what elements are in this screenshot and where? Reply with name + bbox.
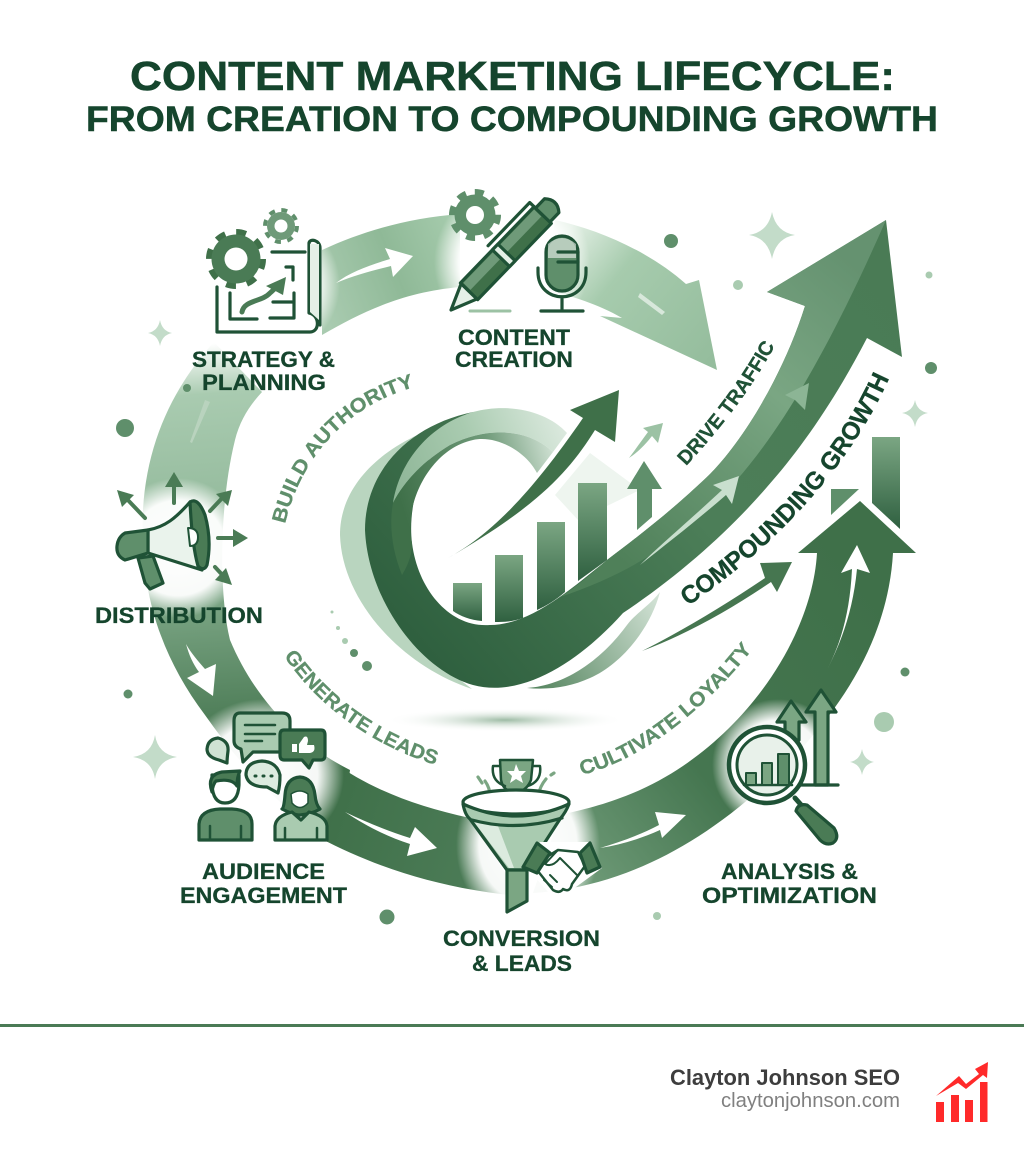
pale outer crescent [340, 422, 472, 689]
heading: CONVERSION [443, 926, 600, 951]
heading: CREATION [455, 347, 573, 372]
icon: red growth chart [936, 1062, 988, 1122]
glow: strategy [196, 213, 340, 357]
central rising arrow [448, 390, 619, 558]
glow: content creation [434, 182, 590, 342]
pale lower crescent [527, 592, 660, 689]
bar: 2 [495, 555, 523, 622]
icon: megaphone with arrows [117, 472, 248, 589]
title [86, 53, 938, 139]
label: build authority: BUILD AUTHORITY [272, 374, 410, 523]
heading [443, 926, 600, 976]
label: cultivate loyalty: CULTIVATE LOYALTY [580, 641, 749, 774]
pale band of C arc [393, 408, 567, 503]
panel: conversion and leads [443, 760, 602, 976]
ring segment: left side [143, 342, 350, 845]
brand name: Clayton Johnson SEO [670, 1065, 900, 1090]
title: CONTENT MARKETING LIFECYCLE: [130, 53, 895, 99]
light arrow on main: upper [785, 383, 809, 410]
footer divider [0, 1024, 1024, 1027]
glow: distribution [108, 478, 248, 618]
dark swoosh with main arrow [365, 220, 902, 688]
ring segment: strategy to creation [322, 214, 460, 335]
ghost house shape [555, 453, 640, 520]
bar: 4 [578, 483, 607, 581]
lifecycle ring [143, 214, 916, 896]
panel: distribution [95, 472, 263, 628]
heading: ANALYSIS & [721, 859, 858, 884]
heading: ENGAGEMENT [180, 883, 348, 908]
heading: OPTIMIZATION [702, 883, 877, 908]
heading: DISTRIBUTION [95, 603, 263, 628]
mid band of C arc [391, 432, 553, 575]
bar: 3 [537, 522, 565, 610]
heading [455, 325, 573, 372]
floor shadow [385, 708, 625, 732]
central swirl and growth arrows [340, 220, 902, 732]
icon: gears and blueprint [209, 210, 320, 332]
bar: 1 [453, 583, 482, 621]
glow: conversion [456, 761, 600, 929]
curved labels [272, 341, 889, 774]
heading: PLANNING [202, 370, 326, 395]
heading [180, 859, 348, 908]
heading [702, 859, 877, 908]
label: generate leads: GENERATE LEADS [286, 650, 438, 764]
heading: CONTENT [458, 325, 571, 350]
heading: STRATEGY & [192, 347, 335, 372]
heading [192, 347, 335, 395]
panel: content creation [438, 190, 586, 372]
icon: magnifier with bars and arrows [729, 690, 838, 844]
heading: AUDIENCE [202, 859, 325, 884]
ring segment: conversion to analysis and growth arrow [533, 501, 916, 893]
icon: trophy, funnel and handshake [463, 760, 602, 912]
glow: analysis [712, 699, 844, 831]
small up arrow [627, 461, 662, 530]
label: drive traffic: DRIVE TRAFFIC [676, 341, 773, 466]
title: FROM CREATION TO COMPOUNDING GROWTH [86, 100, 938, 139]
panel: analysis and optimization [702, 690, 877, 908]
label: compounding growth: COMPOUNDING GROWTH [682, 372, 889, 603]
light arrow on main: lower [640, 476, 739, 565]
panel: strategy and planning [192, 210, 335, 395]
icon: people and speech bubbles [199, 713, 327, 840]
lighter upper face of main arrow [560, 220, 886, 597]
footer brand [670, 1062, 988, 1122]
brand url: claytonjohnson.com [721, 1090, 900, 1112]
lower long arrow [642, 562, 792, 651]
heading: & LEADS [472, 951, 572, 976]
glow: audience [180, 699, 344, 851]
decorative dots and sparkles [116, 212, 937, 924]
icon: gear, pen and microphone [438, 190, 586, 318]
right small triangle [831, 489, 859, 515]
small light arrow [629, 423, 663, 458]
right bar [872, 437, 900, 529]
panel: audience engagement [180, 713, 348, 908]
ring segment: creation to traffic [545, 220, 717, 370]
white streak arrows on ring [186, 248, 870, 856]
ring segment: engagement to conversion [320, 752, 520, 896]
